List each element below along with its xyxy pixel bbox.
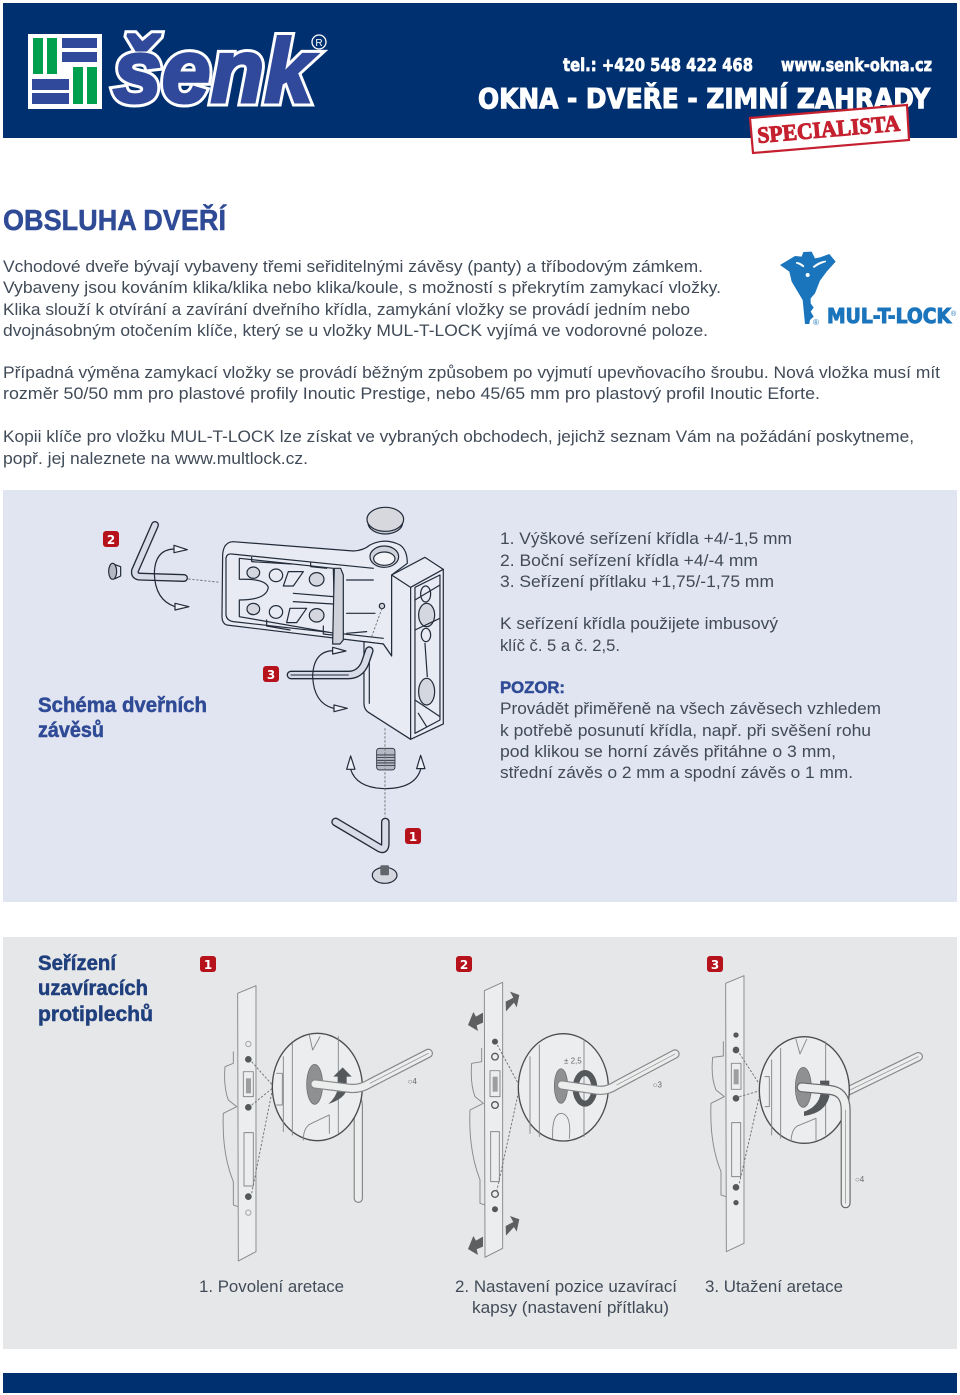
contact phone: tel.: +420 548 422 468 xyxy=(563,55,753,76)
hinge frame block xyxy=(364,557,443,739)
key note xyxy=(500,614,779,655)
screw 1 xyxy=(372,865,397,883)
long key arm xyxy=(847,1057,918,1092)
heading: OBSLUHA DVEŘÍ xyxy=(3,203,227,237)
key xyxy=(562,1054,675,1090)
logo wordmark: šenk xyxy=(113,22,317,122)
heading: strike plates xyxy=(38,952,153,1026)
caption 2 xyxy=(455,1277,677,1317)
heading: strike plates: uzavíracích xyxy=(38,977,148,1000)
heading: hinge scheme: Schéma dveřních xyxy=(38,694,207,717)
lock plate xyxy=(470,982,519,1257)
hex key 1 xyxy=(336,822,385,849)
key note: K seřízení křídla použijete imbusový xyxy=(500,614,779,633)
caption 2: kapsy (nastavení přítlaku) xyxy=(472,1298,669,1317)
warning note: k potřebě posunutí křídla, např. při svěšení rohu xyxy=(500,721,871,740)
logo: mul-t-lock: ® xyxy=(813,318,819,327)
badge 1 xyxy=(405,828,421,844)
warning note: střední závěs o 2 mm a spodní závěs o 1 mm. xyxy=(500,763,853,782)
adjustment list: 2. Boční seřízení křídla +4/-4 mm xyxy=(500,551,758,570)
hex key 3 xyxy=(291,651,369,675)
key copy text block: popř. jej naleznete na www.multlock.cz. xyxy=(3,449,308,468)
warning note xyxy=(500,678,881,782)
magnifier: ± 2,5 xyxy=(564,1056,582,1065)
adjustment screw xyxy=(377,748,395,770)
key xyxy=(802,1087,846,1203)
cap xyxy=(367,507,404,534)
move arrows xyxy=(468,992,519,1255)
logo: mul-t-lock xyxy=(780,252,957,328)
heading: hinge scheme xyxy=(38,694,207,742)
warning note: POZOR: xyxy=(500,678,565,697)
badge 1 xyxy=(200,956,216,972)
key size label: ○3 xyxy=(653,1080,662,1089)
badge 3 xyxy=(263,666,279,682)
badge 3: 3 xyxy=(267,668,275,682)
caption 1: 1. Povolení aretace xyxy=(199,1277,344,1296)
badge 3: 3 xyxy=(711,958,719,972)
rotation arrows 1 xyxy=(347,755,425,789)
caption 3: 3. Utažení aretace xyxy=(705,1277,843,1296)
key size label: ○4 xyxy=(408,1077,417,1086)
header band xyxy=(3,3,957,138)
badge 2: 2 xyxy=(107,533,115,547)
footer band xyxy=(3,1373,957,1393)
step 2 diagram xyxy=(468,982,675,1257)
rotation arrows 3 xyxy=(313,647,347,712)
replacement text block xyxy=(3,363,940,403)
short key arm xyxy=(315,1053,428,1088)
key note: klíč č. 5 a č. 2,5. xyxy=(500,636,620,655)
lock plate xyxy=(223,986,272,1261)
dashed axes xyxy=(188,579,385,817)
badge 3 xyxy=(707,956,723,972)
logo wordmark: R xyxy=(315,38,323,49)
adjustment list: 1. Výškové seřízení křídla +4/-1,5 mm xyxy=(500,529,792,548)
screw 2 xyxy=(109,563,121,579)
key size label: ○4 xyxy=(855,1175,865,1184)
intro text block: Vchodové dveře bývají vybaveny třemi seřiditelnými závěsy (panty) a tříbodovým zámkem. xyxy=(3,257,703,276)
adjustment list xyxy=(500,529,792,591)
hinge plate xyxy=(222,541,407,656)
intro text block: Vybaveny jsou kováním klika/klika nebo klika/koule, s možností s překrytím zamykací vložky. xyxy=(3,278,721,297)
hinge diagram xyxy=(109,507,443,883)
key copy text block xyxy=(3,427,914,468)
intro text block: Klika slouží k otvírání a zavírání dveřního křídla, zamykání vložky se provádí jedním nebo xyxy=(3,300,690,319)
badge 2 xyxy=(103,531,119,547)
caption 2: 2. Nastavení pozice uzavírací xyxy=(455,1277,677,1296)
long key xyxy=(350,1092,358,1198)
logo: mul-t-lock: MUL-T-LOCK xyxy=(827,304,952,328)
heading: strike plates: protiplechů xyxy=(38,1003,153,1026)
logo mark xyxy=(28,34,102,109)
intro text block xyxy=(3,257,721,340)
badge 1: 1 xyxy=(204,958,212,972)
badge 2 xyxy=(456,956,472,972)
intro text block: dvojnásobným otočením klíče, který se u vložky MUL-T-LOCK vyjímá ve vodorovné poloze. xyxy=(3,321,708,340)
step 1 diagram xyxy=(223,986,428,1261)
magnifier xyxy=(759,1037,849,1143)
adjustment list: 3. Seřízení přítlaku +1,75/-1,75 mm xyxy=(500,572,774,591)
rotation arrows 2 xyxy=(154,545,189,610)
badge 2: 2 xyxy=(460,958,468,972)
heading: strike plates: Seřízení xyxy=(38,952,117,975)
heading: hinge scheme: závěsů xyxy=(38,719,104,742)
warning note: pod klikou se horní závěs přitáhne o 3 mm, xyxy=(500,742,836,761)
magnifier xyxy=(518,1034,608,1141)
panel: hinge scheme xyxy=(3,490,957,902)
lock plate xyxy=(711,976,760,1252)
panel: strike plate adjustment xyxy=(3,937,957,1349)
logo: mul-t-lock: ® xyxy=(951,310,957,318)
warning note: Provádět přiměřeně na všech závěsech vzhledem xyxy=(500,699,881,718)
logo wordmark: šenk xyxy=(113,22,317,122)
replacement text block: rozměr 50/50 mm pro plastové profily Inoutic Prestige, nebo 45/65 mm pro plastový profil Inoutic Eforte. xyxy=(3,384,820,403)
key copy text block: Kopii klíče pro vložku MUL-T-LOCK lze získat ve vybraných obchodech, jejichž seznam Vám na požádání poskytneme, xyxy=(3,427,914,446)
badge 1: 1 xyxy=(409,830,417,844)
replacement text block: Případná výměna zamykací vložky se provádí běžným způsobem po vyjmutí upevňovacího šroubu. Nová vložka musí mít xyxy=(3,363,940,382)
stamp: specialista: SPECIALISTA xyxy=(756,111,901,148)
magnifier xyxy=(272,1033,362,1141)
step 3 diagram xyxy=(711,976,918,1252)
hex key 2 xyxy=(135,525,184,578)
